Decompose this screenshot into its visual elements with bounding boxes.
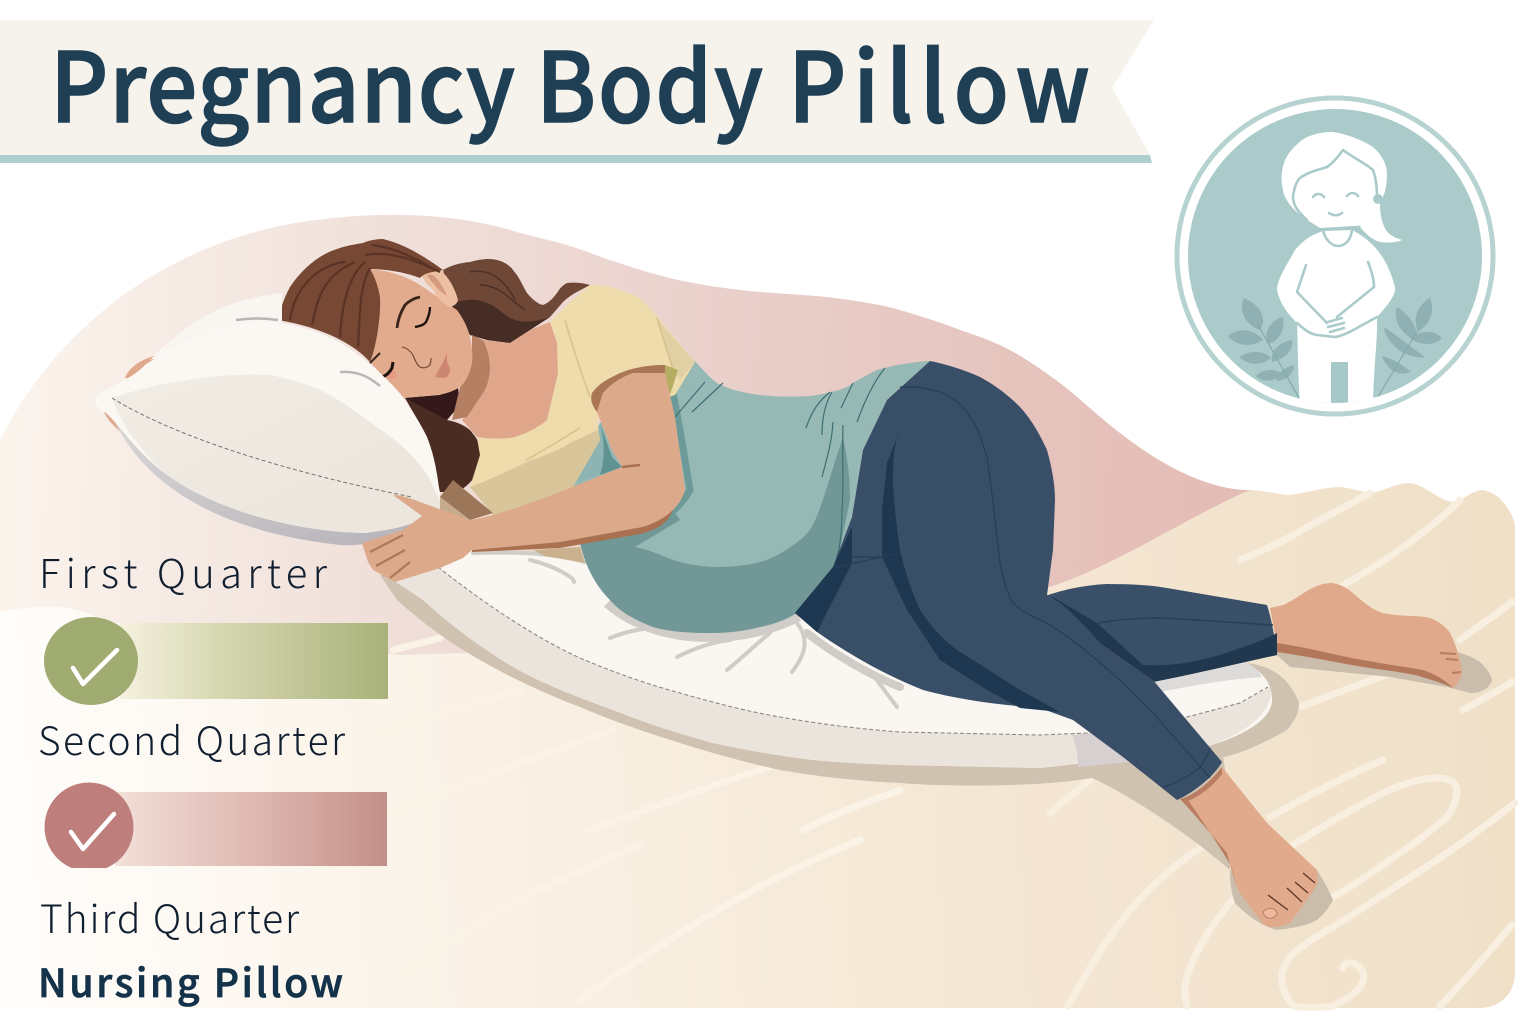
- face details: [1293, 150, 1377, 337]
- title: Pregnancy: [50, 10, 515, 150]
- pillow wrinkles: [473, 553, 900, 707]
- legend: first quarter: [39, 542, 388, 705]
- legend: second quarter: [40, 724, 387, 868]
- nose: [402, 347, 431, 368]
- finger creases: [370, 535, 410, 578]
- legend: third quarter: Third Quarter: [40, 889, 300, 945]
- bed surface: [0, 483, 1515, 1008]
- arm and hand: [362, 373, 685, 582]
- belly shade: [580, 437, 850, 633]
- arm rim shadow: [600, 393, 690, 540]
- hair back: [443, 259, 590, 343]
- pants seams: [833, 387, 1210, 787]
- green check icon: [44, 617, 138, 705]
- hair front: [278, 239, 443, 362]
- pillow top: [378, 550, 1272, 768]
- lips: [435, 353, 450, 378]
- leaves left: [1228, 298, 1442, 381]
- legend: nursing pillow: Nursing Pillow: [38, 953, 343, 1009]
- red check icon: [44, 782, 134, 872]
- lower hair: [405, 388, 480, 492]
- far closed eye: [385, 369, 397, 379]
- back leg: [1040, 584, 1277, 682]
- closed eye: [415, 307, 430, 327]
- arm underside shade: [472, 510, 673, 552]
- body: [1277, 230, 1395, 410]
- woman sleeping on side: [278, 239, 1462, 927]
- legend: second quarter: Second Quarter: [38, 711, 346, 767]
- torso: [573, 361, 930, 633]
- legend: first quarter: First Quarter: [39, 542, 328, 600]
- bed fabric swirls: [380, 493, 1515, 1008]
- head pillow: [95, 293, 440, 545]
- pillow top: [95, 322, 440, 533]
- badge: pregnant woman icon: [1177, 98, 1493, 414]
- eyebrow: [397, 297, 420, 328]
- title banner: [0, 10, 1154, 163]
- pillow back flap: [150, 293, 282, 360]
- leaves right: [1416, 298, 1432, 331]
- sleeve band: [591, 365, 665, 412]
- body pillow: [378, 550, 1299, 870]
- pillow underside: [108, 405, 438, 545]
- shirt: [470, 285, 695, 515]
- pink backdrop wave: [0, 215, 1250, 700]
- front foot: [1180, 767, 1318, 927]
- pillow ground shadow: [380, 560, 1299, 870]
- title: Pillow: [788, 10, 1090, 150]
- ponytail: [1360, 203, 1402, 243]
- pillow seam: [112, 398, 412, 497]
- tan shadow under arm: [440, 480, 585, 563]
- red bar: [115, 792, 387, 866]
- title: Body: [536, 10, 763, 150]
- back foot: [1270, 583, 1462, 688]
- far eyebrow: [370, 353, 380, 363]
- foot shadows: [1230, 648, 1492, 930]
- pants: [795, 361, 1222, 800]
- face: [370, 269, 472, 398]
- hair: [1282, 132, 1387, 228]
- pants shading: [795, 435, 1060, 712]
- pillow inner face: [112, 375, 440, 533]
- pillow corner skin: [125, 355, 158, 380]
- neck shadow: [452, 335, 490, 420]
- title: [50, 10, 1090, 150]
- shirt folds: [675, 368, 885, 563]
- ear: [420, 269, 458, 307]
- pillow lower band: [385, 567, 1271, 768]
- chest skin: [462, 322, 558, 439]
- pillow stitching: [438, 567, 1268, 735]
- green bar: [120, 623, 388, 699]
